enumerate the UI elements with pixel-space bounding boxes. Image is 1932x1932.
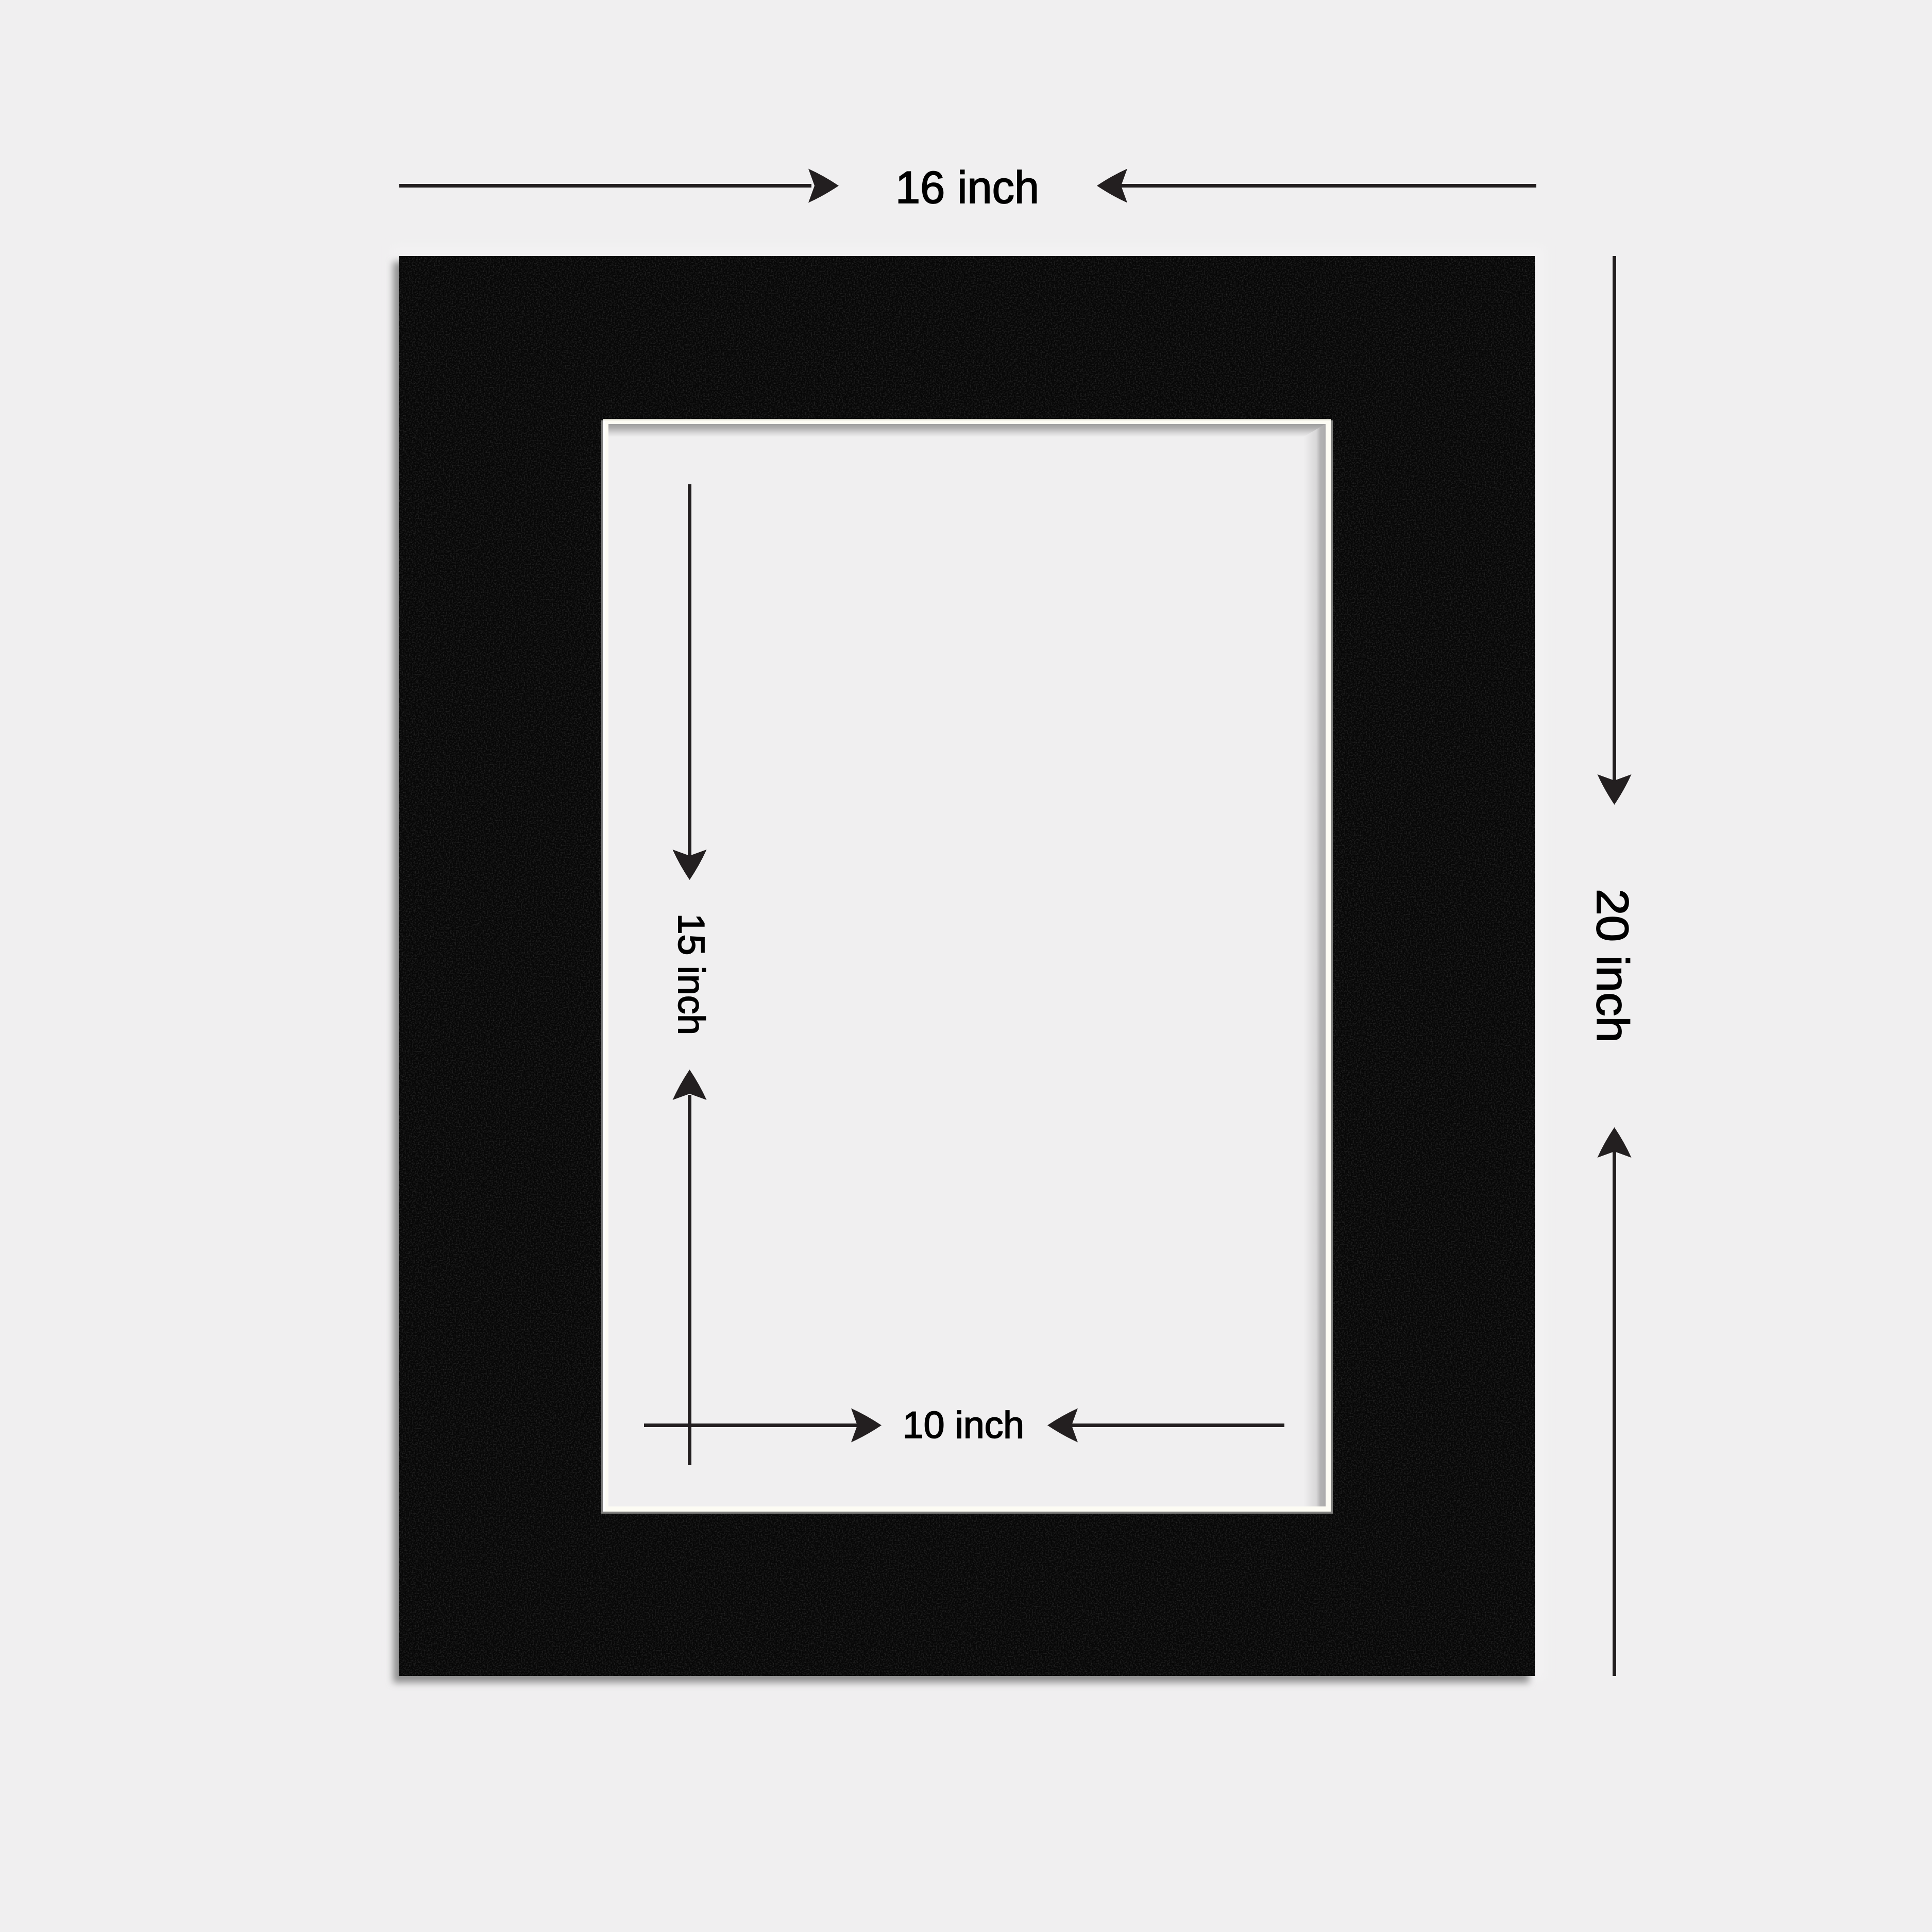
window: cream bevel: [603, 420, 1331, 1512]
arrow: 16 inch width, left: [399, 169, 839, 203]
mat surface: [399, 256, 1535, 1676]
label: 20 inch: 20 inch: [1587, 889, 1637, 1043]
mat drop shadow: [393, 262, 1529, 1683]
window: opening: [608, 424, 1326, 1506]
arrow: 10 inch width, right: [1047, 1409, 1284, 1443]
window: top inner shadow: [608, 424, 1326, 437]
window: gray cut edge: [601, 420, 1333, 1514]
arrow: 20 inch height, top: [1597, 256, 1631, 805]
window: right inner shadow: [1303, 424, 1326, 1506]
arrow: 10 inch width, left: [644, 1409, 882, 1443]
mat paper texture: [399, 256, 1535, 1676]
arrow: 16 inch width, right: [1097, 169, 1536, 203]
panel: black mat board with window: [393, 246, 1545, 1683]
window: left bevel bright strip: [603, 420, 605, 1512]
label: 15 inch: 15 inch: [670, 913, 711, 1035]
mat highlight glow: [393, 246, 1545, 1679]
label: 16 inch: 16 inch: [895, 162, 1039, 213]
arrow: 15 inch height, bottom: [673, 1070, 707, 1465]
arrow: 15 inch height, top: [673, 484, 707, 880]
arrow: 20 inch height, bottom: [1597, 1127, 1631, 1676]
window: top bevel edge highlight: [603, 419, 1331, 420]
label: 10 inch: 10 inch: [903, 1404, 1024, 1446]
